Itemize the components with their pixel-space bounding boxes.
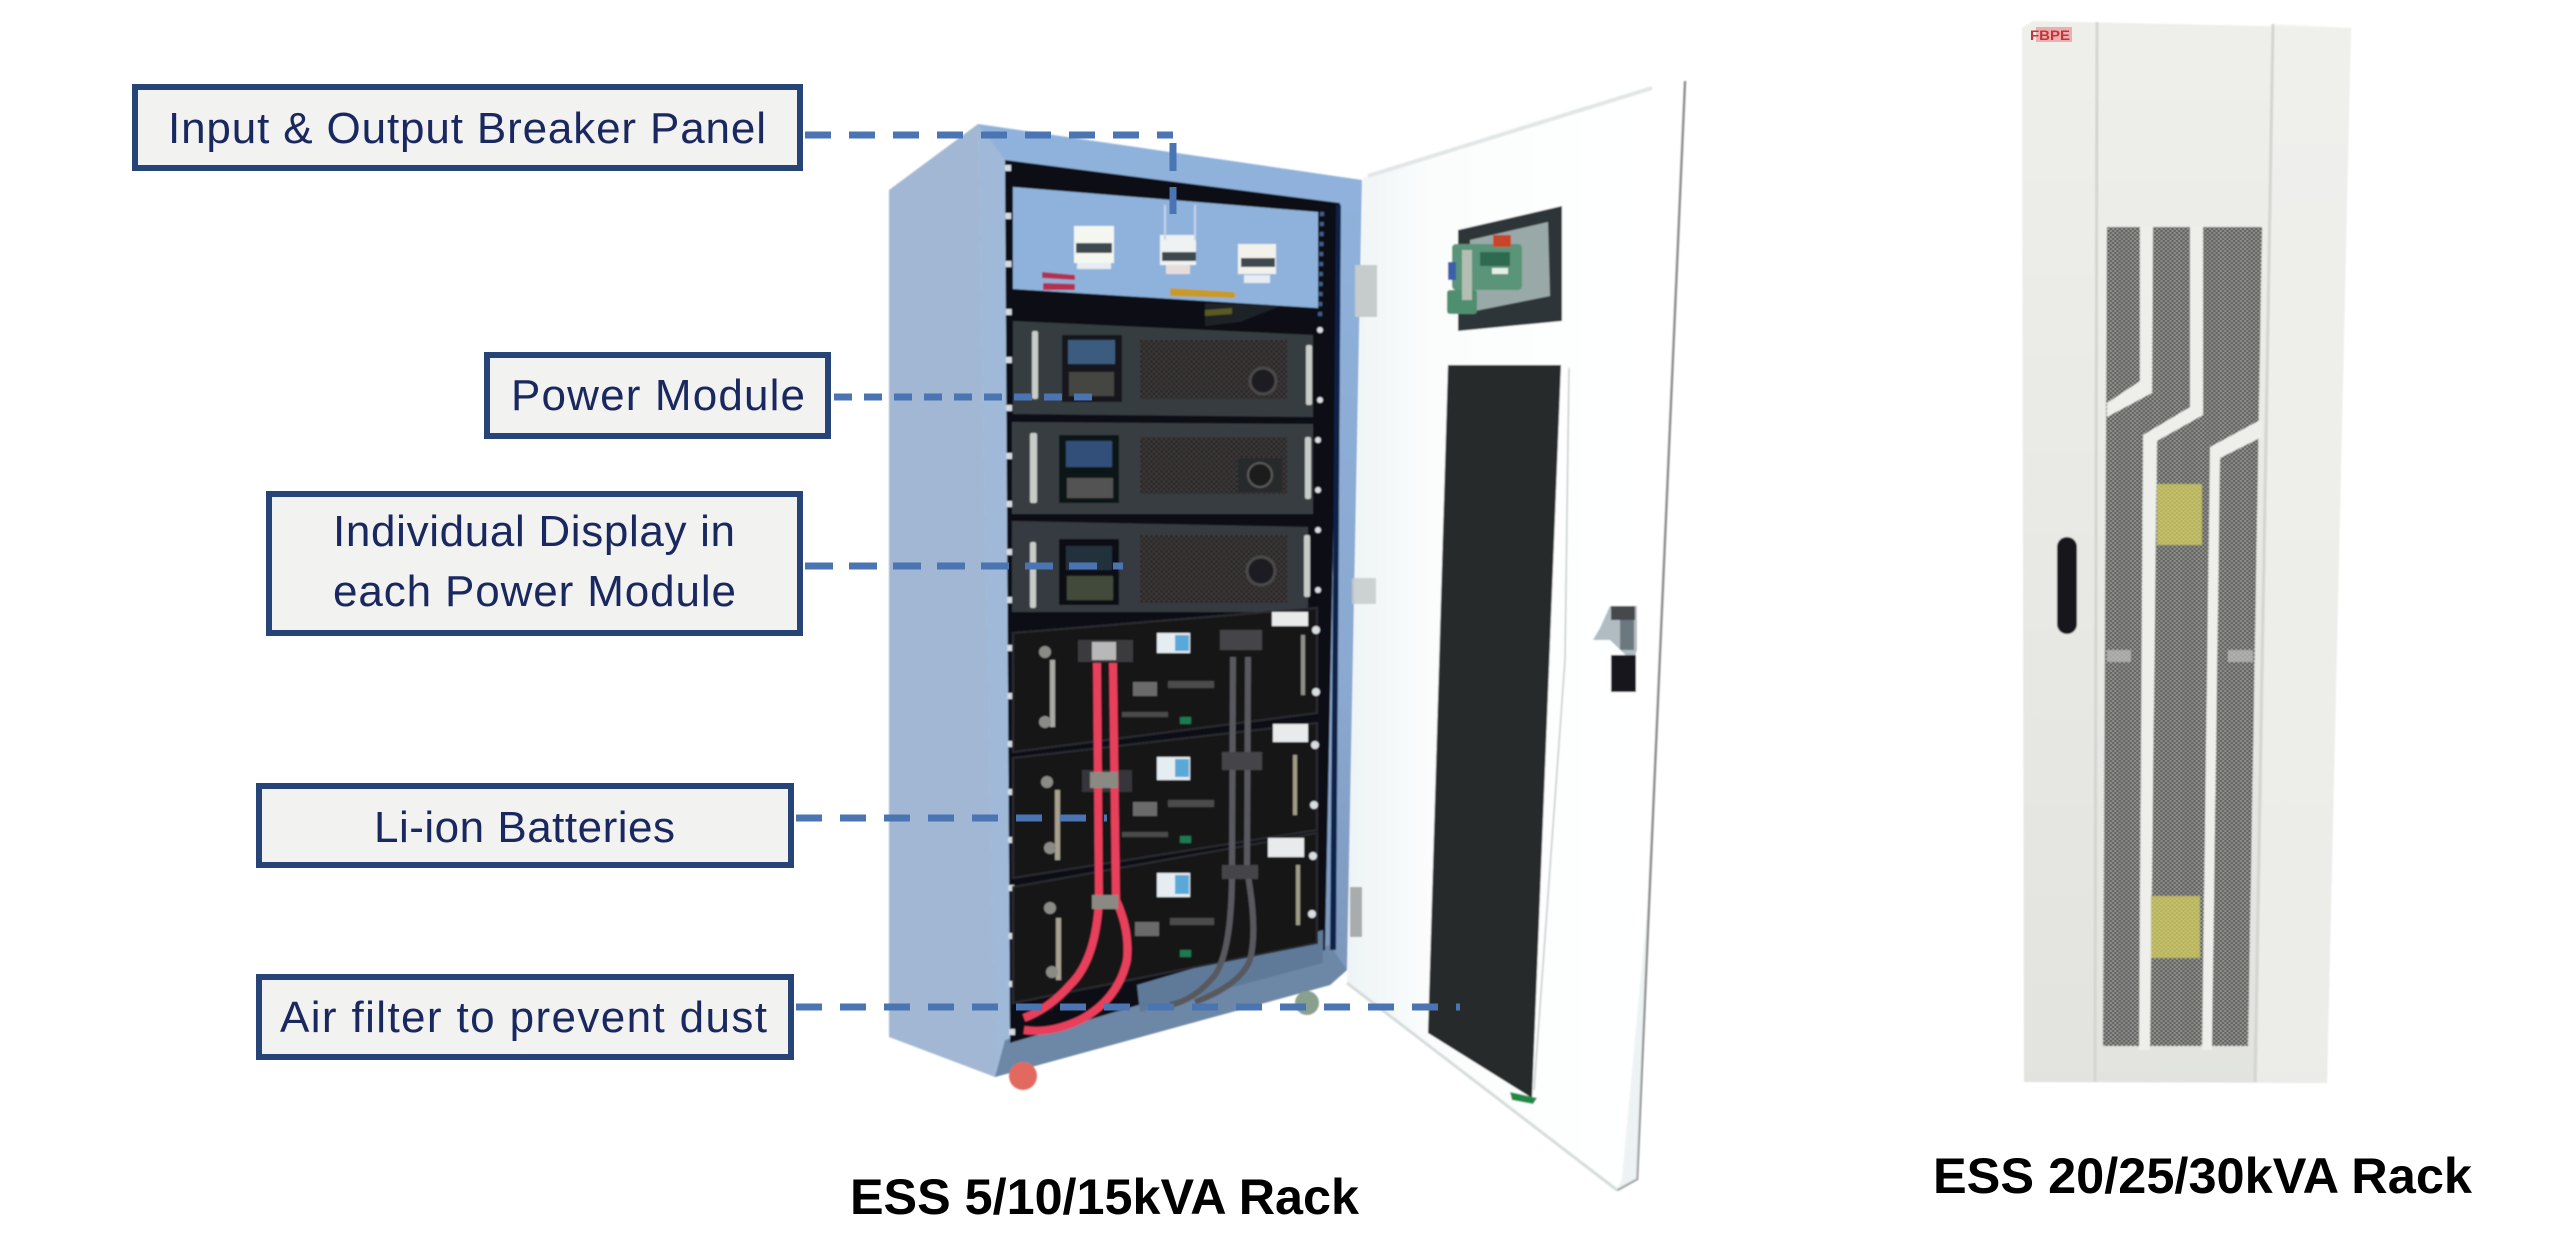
label: li-ion batteries	[259, 786, 791, 865]
rack side panel	[889, 124, 995, 1077]
door handle	[2057, 537, 2077, 634]
label: air filter to prevent dust	[259, 977, 791, 1057]
cabinet lighter right panel	[2257, 24, 2351, 1083]
label: individual display in each power module: Individual Display in	[333, 507, 735, 556]
leader line: air filter	[796, 1004, 1460, 1010]
power module 2	[1012, 422, 1313, 514]
yellow label behind vent, upper	[2157, 484, 2202, 545]
leader line: li-ion batteries	[796, 814, 1107, 822]
vent strip 3	[2202, 419, 2262, 1050]
left rack rail	[1008, 165, 1012, 1035]
cabinet seams	[2095, 22, 2273, 1082]
label: air filter to prevent dust: Air filter to prevent dust	[280, 993, 767, 1042]
power module 1	[1013, 321, 1313, 417]
door display cut-out with circuit board	[1447, 206, 1562, 331]
label: input and output breaker panel	[135, 87, 800, 168]
door latch	[1593, 606, 1637, 692]
rack front frame, left column	[978, 124, 1010, 1077]
label: individual display in each power module	[269, 494, 800, 633]
rack interior	[1005, 160, 1340, 1043]
breaker panel	[1013, 187, 1318, 308]
power module 3	[1012, 521, 1310, 612]
air filter	[1428, 365, 1569, 1104]
right rail bolts	[1308, 327, 1323, 918]
cabinet logo: FBPE	[2030, 27, 2070, 43]
vent strip 2	[2139, 227, 2203, 1050]
light reflections in vent	[2107, 650, 2253, 662]
label: input and output breaker panel: Input & Output Breaker Panel	[168, 104, 766, 153]
breaker 2	[1160, 205, 1196, 274]
breaker 3	[1238, 244, 1276, 283]
photo: ESS 5/10/15kVA open rack	[889, 72, 1685, 1190]
rack front frame	[978, 124, 1362, 1077]
leader line: power module	[834, 394, 1097, 400]
label: power module	[487, 355, 828, 436]
black battery cables	[1170, 630, 1262, 1005]
battery 2	[1013, 723, 1317, 878]
leader line: individual display	[805, 562, 1123, 570]
cabinet body	[2022, 21, 2351, 1083]
battery 3	[1013, 833, 1317, 1003]
rack floor	[1137, 930, 1323, 1012]
battery 1	[1013, 608, 1317, 752]
rack bottom lip	[995, 945, 1347, 1077]
breaker 1	[1074, 226, 1114, 269]
rack casters	[1009, 991, 1319, 1090]
vent strip 1	[2107, 227, 2153, 417]
door hinges	[1350, 265, 1377, 937]
perforated vent area	[2103, 227, 2262, 1046]
right rack rail	[1320, 205, 1341, 950]
label: li-ion batteries: Li-ion Batteries	[374, 803, 675, 852]
cabinet door	[1347, 72, 1685, 1190]
caption: ESS 20/25/30kVA rack: ESS 20/25/30kVA Rack	[1933, 1148, 2472, 1204]
label: individual display in each power module: each Power Module	[333, 567, 736, 616]
photo: ESS 20/25/30kVA closed cabinet	[2022, 21, 2351, 1083]
red battery cables	[1024, 642, 1128, 1031]
leader line: breaker panel	[805, 135, 1173, 214]
label: power module: Power Module	[511, 371, 805, 420]
wiring behind breaker panel	[1043, 283, 1280, 326]
yellow label behind vent, lower	[2151, 896, 2200, 958]
caption: ESS 5/10/15kVA rack: ESS 5/10/15kVA Rack	[850, 1169, 1359, 1225]
